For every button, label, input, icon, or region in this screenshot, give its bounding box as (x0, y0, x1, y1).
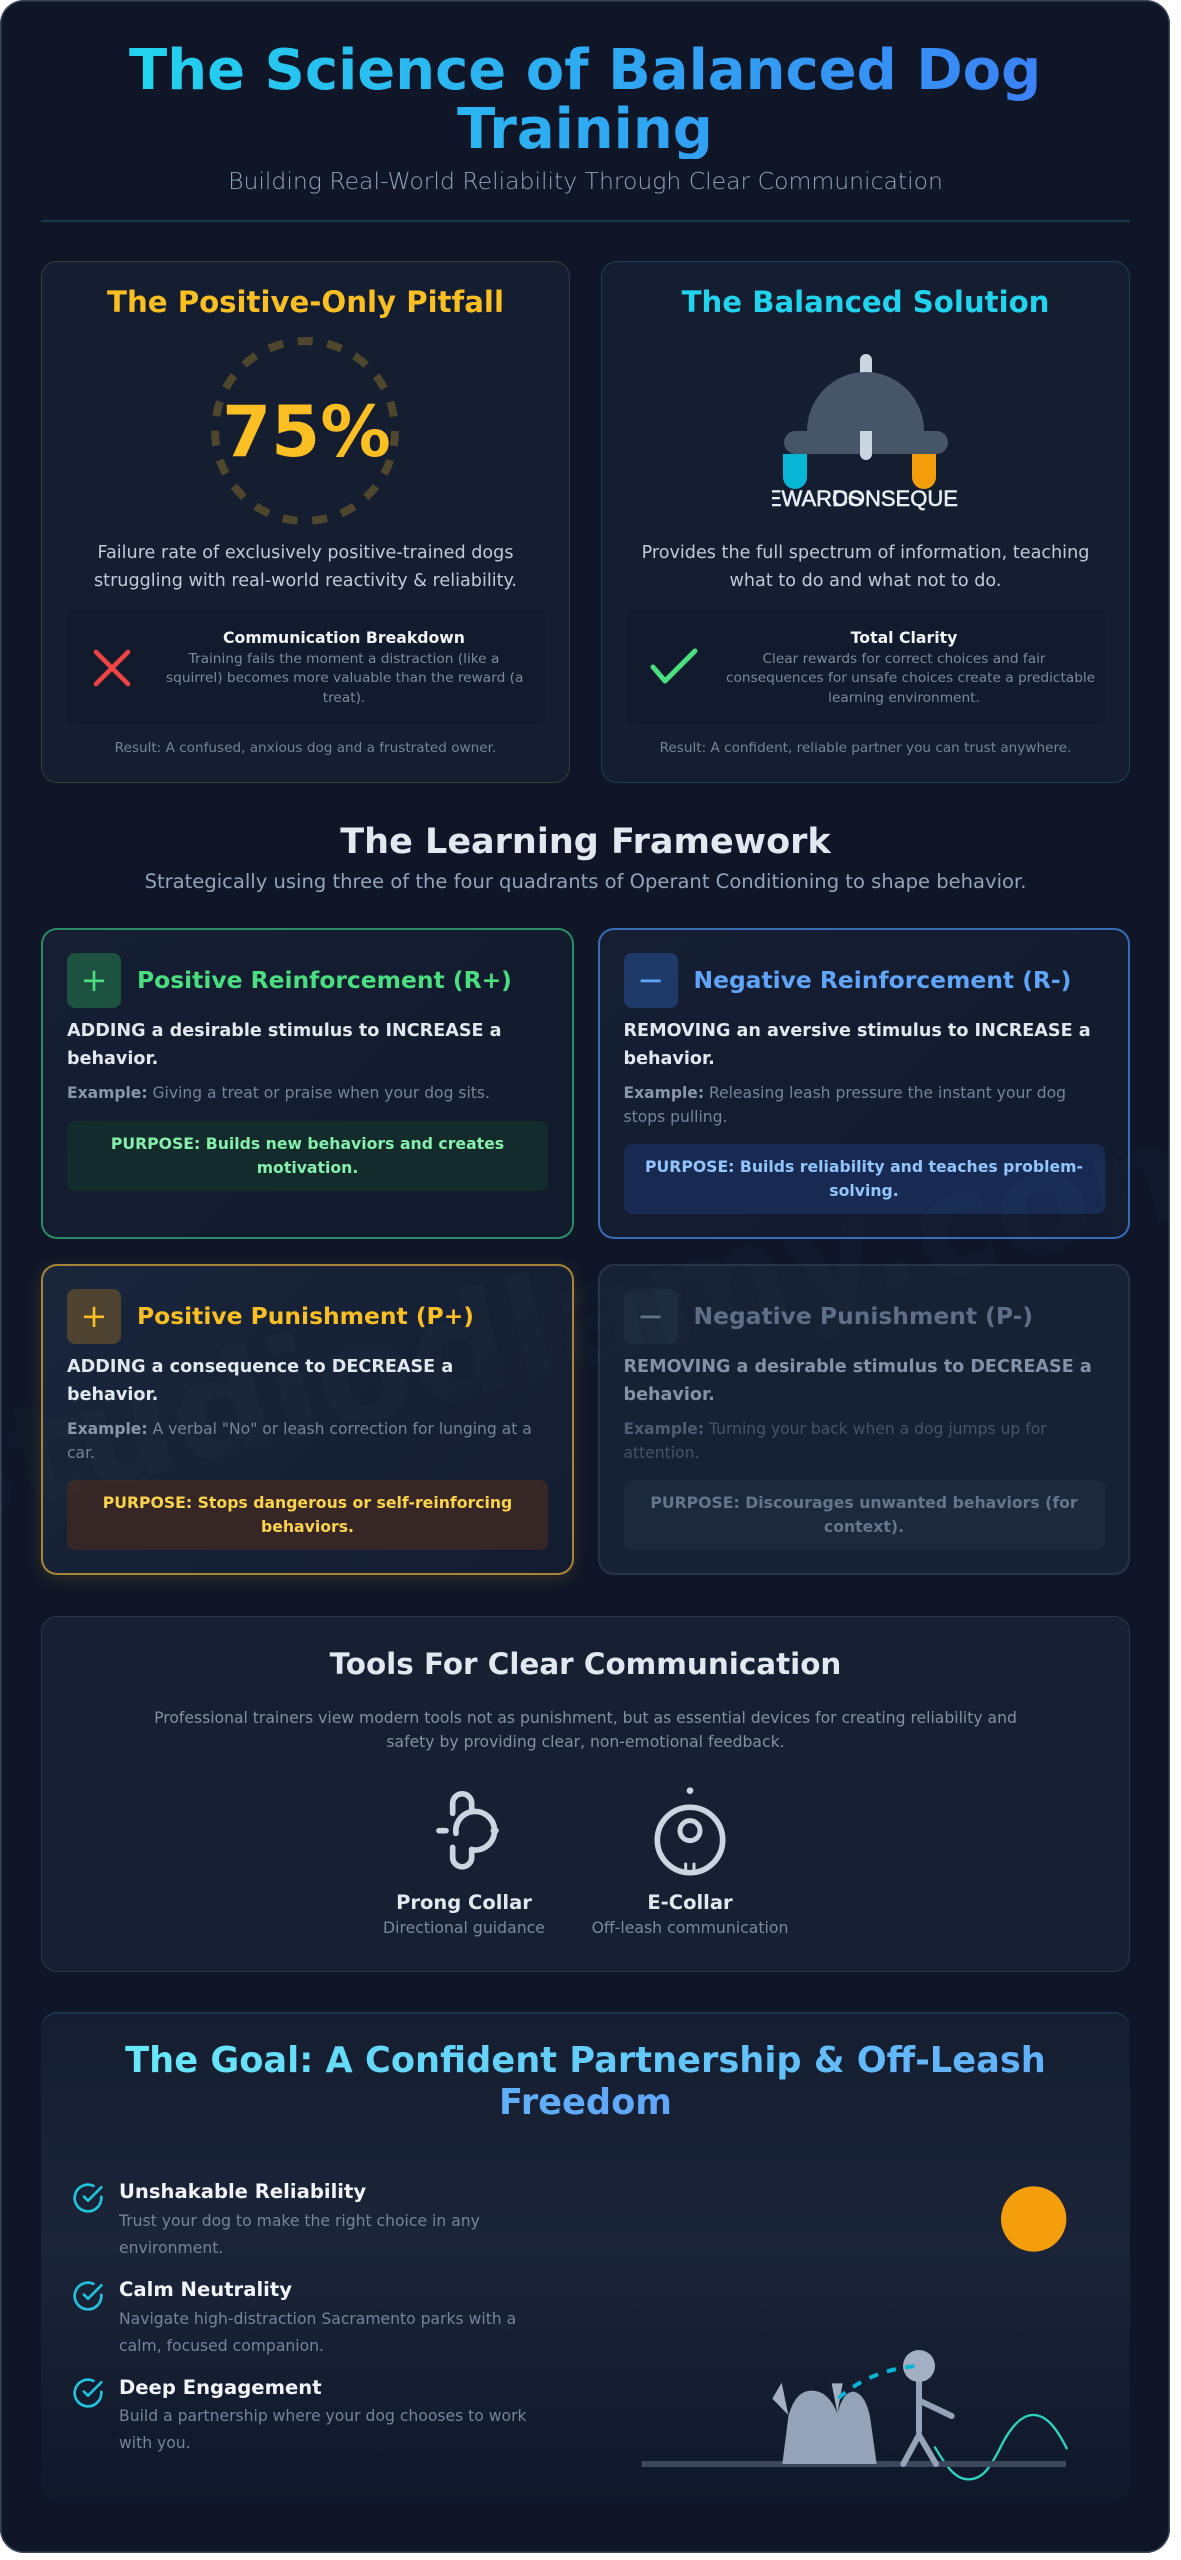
icon: minus (624, 953, 678, 1008)
definition: behavior. (67, 1049, 158, 1069)
icon: plus (67, 953, 121, 1008)
benefit: calm neutrality (73, 2278, 516, 2355)
benefit heading: Unshakable Reliability (119, 2180, 366, 2203)
stat description: struggling with real-world reactivity & reliability. (94, 571, 517, 591)
benefit: deep engagement (73, 2376, 527, 2452)
example (624, 1084, 1066, 1126)
benefit: unshakable reliability (73, 2180, 480, 2257)
icon: plus: + (81, 1297, 107, 1335)
purpose box (624, 1480, 1104, 1550)
benefit text (119, 2310, 516, 2355)
panel description (642, 543, 1089, 591)
callout text: learning environment. (828, 690, 980, 706)
stat: 75% dashed ring (211, 337, 399, 525)
panel: the positive-only pitfall (41, 261, 570, 783)
example: attention. (624, 1444, 699, 1462)
callout text: Training fails the moment a distraction (like a (189, 650, 499, 666)
tool label: prong collar (383, 1891, 545, 1937)
result line: Result: A confident, reliable partner you can trust anywhere. (660, 740, 1071, 756)
definition: REMOVING an aversive stimulus to INCREASE a (624, 1021, 1091, 1041)
result line: Result: A confused, anxious dog and a frustrated owner. (115, 740, 496, 756)
icon: check circle (73, 2183, 103, 2213)
callout heading: Communication Breakdown (223, 628, 465, 647)
tool label: prong collar: Prong Collar (396, 1891, 532, 1914)
definition: REMOVING a desirable stimulus to DECREASE a (624, 1357, 1092, 1377)
card heading: Negative Reinforcement (R-) (694, 966, 1071, 994)
stat: 75% dashed ring: 75% (222, 391, 391, 473)
definition: behavior. (624, 1385, 715, 1405)
icon: minus: − (637, 961, 664, 999)
purpose box: solving. (829, 1181, 899, 1200)
callout text (166, 650, 523, 706)
benefit text: Build a partnership where your dog chooses to work (119, 2407, 527, 2425)
callout text: squirrel) becomes more valuable than the reward (a (166, 670, 523, 686)
purpose box: PURPOSE: Builds new behaviors and creates (111, 1134, 504, 1153)
benefit heading: Deep Engagement (119, 2376, 322, 2399)
benefit text (119, 2407, 527, 2452)
callout text: consequences for unsafe choices create a predictable (726, 670, 1095, 686)
card heading: Negative Punishment (P-) (694, 1302, 1033, 1330)
definition: behavior. (624, 1049, 715, 1069)
definition: ADDING a consequence to DECREASE a (67, 1357, 453, 1377)
icon: green check (650, 648, 698, 684)
stat description (94, 543, 517, 591)
purpose box: PURPOSE: Stops dangerous or self-reinforcing (103, 1493, 512, 1512)
icon: minus: − (637, 1297, 664, 1335)
purpose box (624, 1144, 1104, 1214)
icon: plus (67, 1289, 121, 1344)
definition: behavior. (67, 1385, 158, 1405)
section subheading: Strategically using three of the four quadrants of Operant Conditioning to shape behavior. (145, 870, 1026, 893)
purpose box (67, 1121, 548, 1191)
panel description (154, 1709, 1017, 1751)
icon: minus (624, 1289, 678, 1344)
purpose box: behaviors. (261, 1517, 354, 1536)
tool label: prong collar: Directional guidance (383, 1918, 545, 1937)
benefit text: with you. (119, 2434, 191, 2452)
tool label: e-collar: E-Collar (647, 1891, 733, 1914)
icon: e-collar (654, 1787, 726, 1876)
panel heading: Freedom (499, 2082, 672, 2123)
example (624, 1420, 1047, 1462)
card: negative punishment (dimmed) (598, 1264, 1130, 1575)
icon: check circle (73, 2281, 103, 2311)
purpose box (67, 1480, 548, 1550)
panel description: safety by providing clear, non-emotional feedback. (386, 1733, 785, 1751)
title: Training (457, 97, 713, 162)
purpose box: motivation. (257, 1158, 358, 1177)
card: positive reinforcement (41, 928, 574, 1239)
panel heading: The Goal: A Confident Partnership & Off-Leash (125, 2040, 1046, 2081)
section heading: The Learning Framework (340, 822, 831, 862)
panel description: Professional trainers view modern tools not as punishment, but as essential devices for creating reliability and (154, 1709, 1017, 1727)
example: stops pulling. (624, 1108, 727, 1126)
definition (67, 1357, 453, 1405)
example: car. (67, 1444, 95, 1462)
title (129, 41, 1041, 159)
panel description: what to do and what not to do. (730, 571, 1001, 591)
benefit heading: Calm Neutrality (119, 2278, 292, 2301)
example: Example: A verbal "No" or leash correction for lunging at a (67, 1420, 532, 1438)
panel: tools for clear communication (41, 1616, 1130, 1972)
illustration: dog and handler walking under the sun (642, 2186, 1068, 2480)
panel: the balanced solution (601, 261, 1130, 783)
example: Example: Releasing leash pressure the instant your dog (624, 1084, 1066, 1102)
icon: plus: + (81, 961, 107, 999)
panel heading (125, 2040, 1046, 2123)
benefit text: Navigate high-distraction Sacramento parks with a (119, 2310, 516, 2328)
purpose box: PURPOSE: Discourages unwanted behaviors (for (650, 1493, 1078, 1512)
card heading: Positive Punishment (P+) (137, 1302, 474, 1330)
example: Example: Turning your back when a dog jumps up for (624, 1420, 1047, 1438)
definition (67, 1021, 502, 1069)
panel description: Provides the full spectrum of information, teaching (642, 543, 1089, 563)
card: negative reinforcement (598, 928, 1130, 1239)
benefit text: Trust your dog to make the right choice in any (119, 2212, 480, 2230)
definition (624, 1021, 1091, 1069)
icon: prong collar (436, 1791, 499, 1870)
definition: ADDING a desirable stimulus to INCREASE a (67, 1021, 502, 1041)
example (67, 1420, 532, 1462)
subtitle: Building Real-World Reliability Through Clear Communication (228, 167, 943, 195)
purpose box: context). (824, 1517, 904, 1536)
panel heading: Tools For Clear Communication (330, 1646, 841, 1680)
icon: balance scale with overlapping labels (772, 354, 958, 511)
callout text: Clear rewards for correct choices and fair (762, 650, 1046, 666)
example: Example: Giving a treat or praise when your dog sits. (67, 1084, 490, 1102)
callout heading: Total Clarity (851, 628, 957, 647)
benefit text (118, 2212, 480, 2257)
card heading: Positive Reinforcement (R+) (137, 966, 512, 994)
tool label: e-collar (592, 1891, 788, 1937)
panel heading: The Balanced Solution (682, 285, 1049, 319)
purpose box: PURPOSE: Builds reliability and teaches problem- (645, 1157, 1083, 1176)
icon: check circle (73, 2378, 103, 2408)
panel heading: The Positive-Only Pitfall (107, 285, 504, 319)
callout text: treat). (323, 690, 365, 706)
panel: the goal (41, 2012, 1130, 2502)
tool label: e-collar: Off-leash communication (592, 1918, 788, 1937)
callout: communication breakdown (67, 610, 546, 724)
card: positive punishment (41, 1264, 574, 1575)
definition (624, 1357, 1092, 1405)
callout: total clarity (627, 610, 1106, 724)
benefit text: environment. (119, 2239, 223, 2257)
stat description: Failure rate of exclusively positive-trained dogs (97, 543, 514, 563)
benefit text: calm, focused companion. (119, 2337, 324, 2355)
icon: red cross (94, 650, 130, 686)
title: The Science of Balanced Dog (129, 38, 1041, 103)
callout text (726, 650, 1095, 706)
